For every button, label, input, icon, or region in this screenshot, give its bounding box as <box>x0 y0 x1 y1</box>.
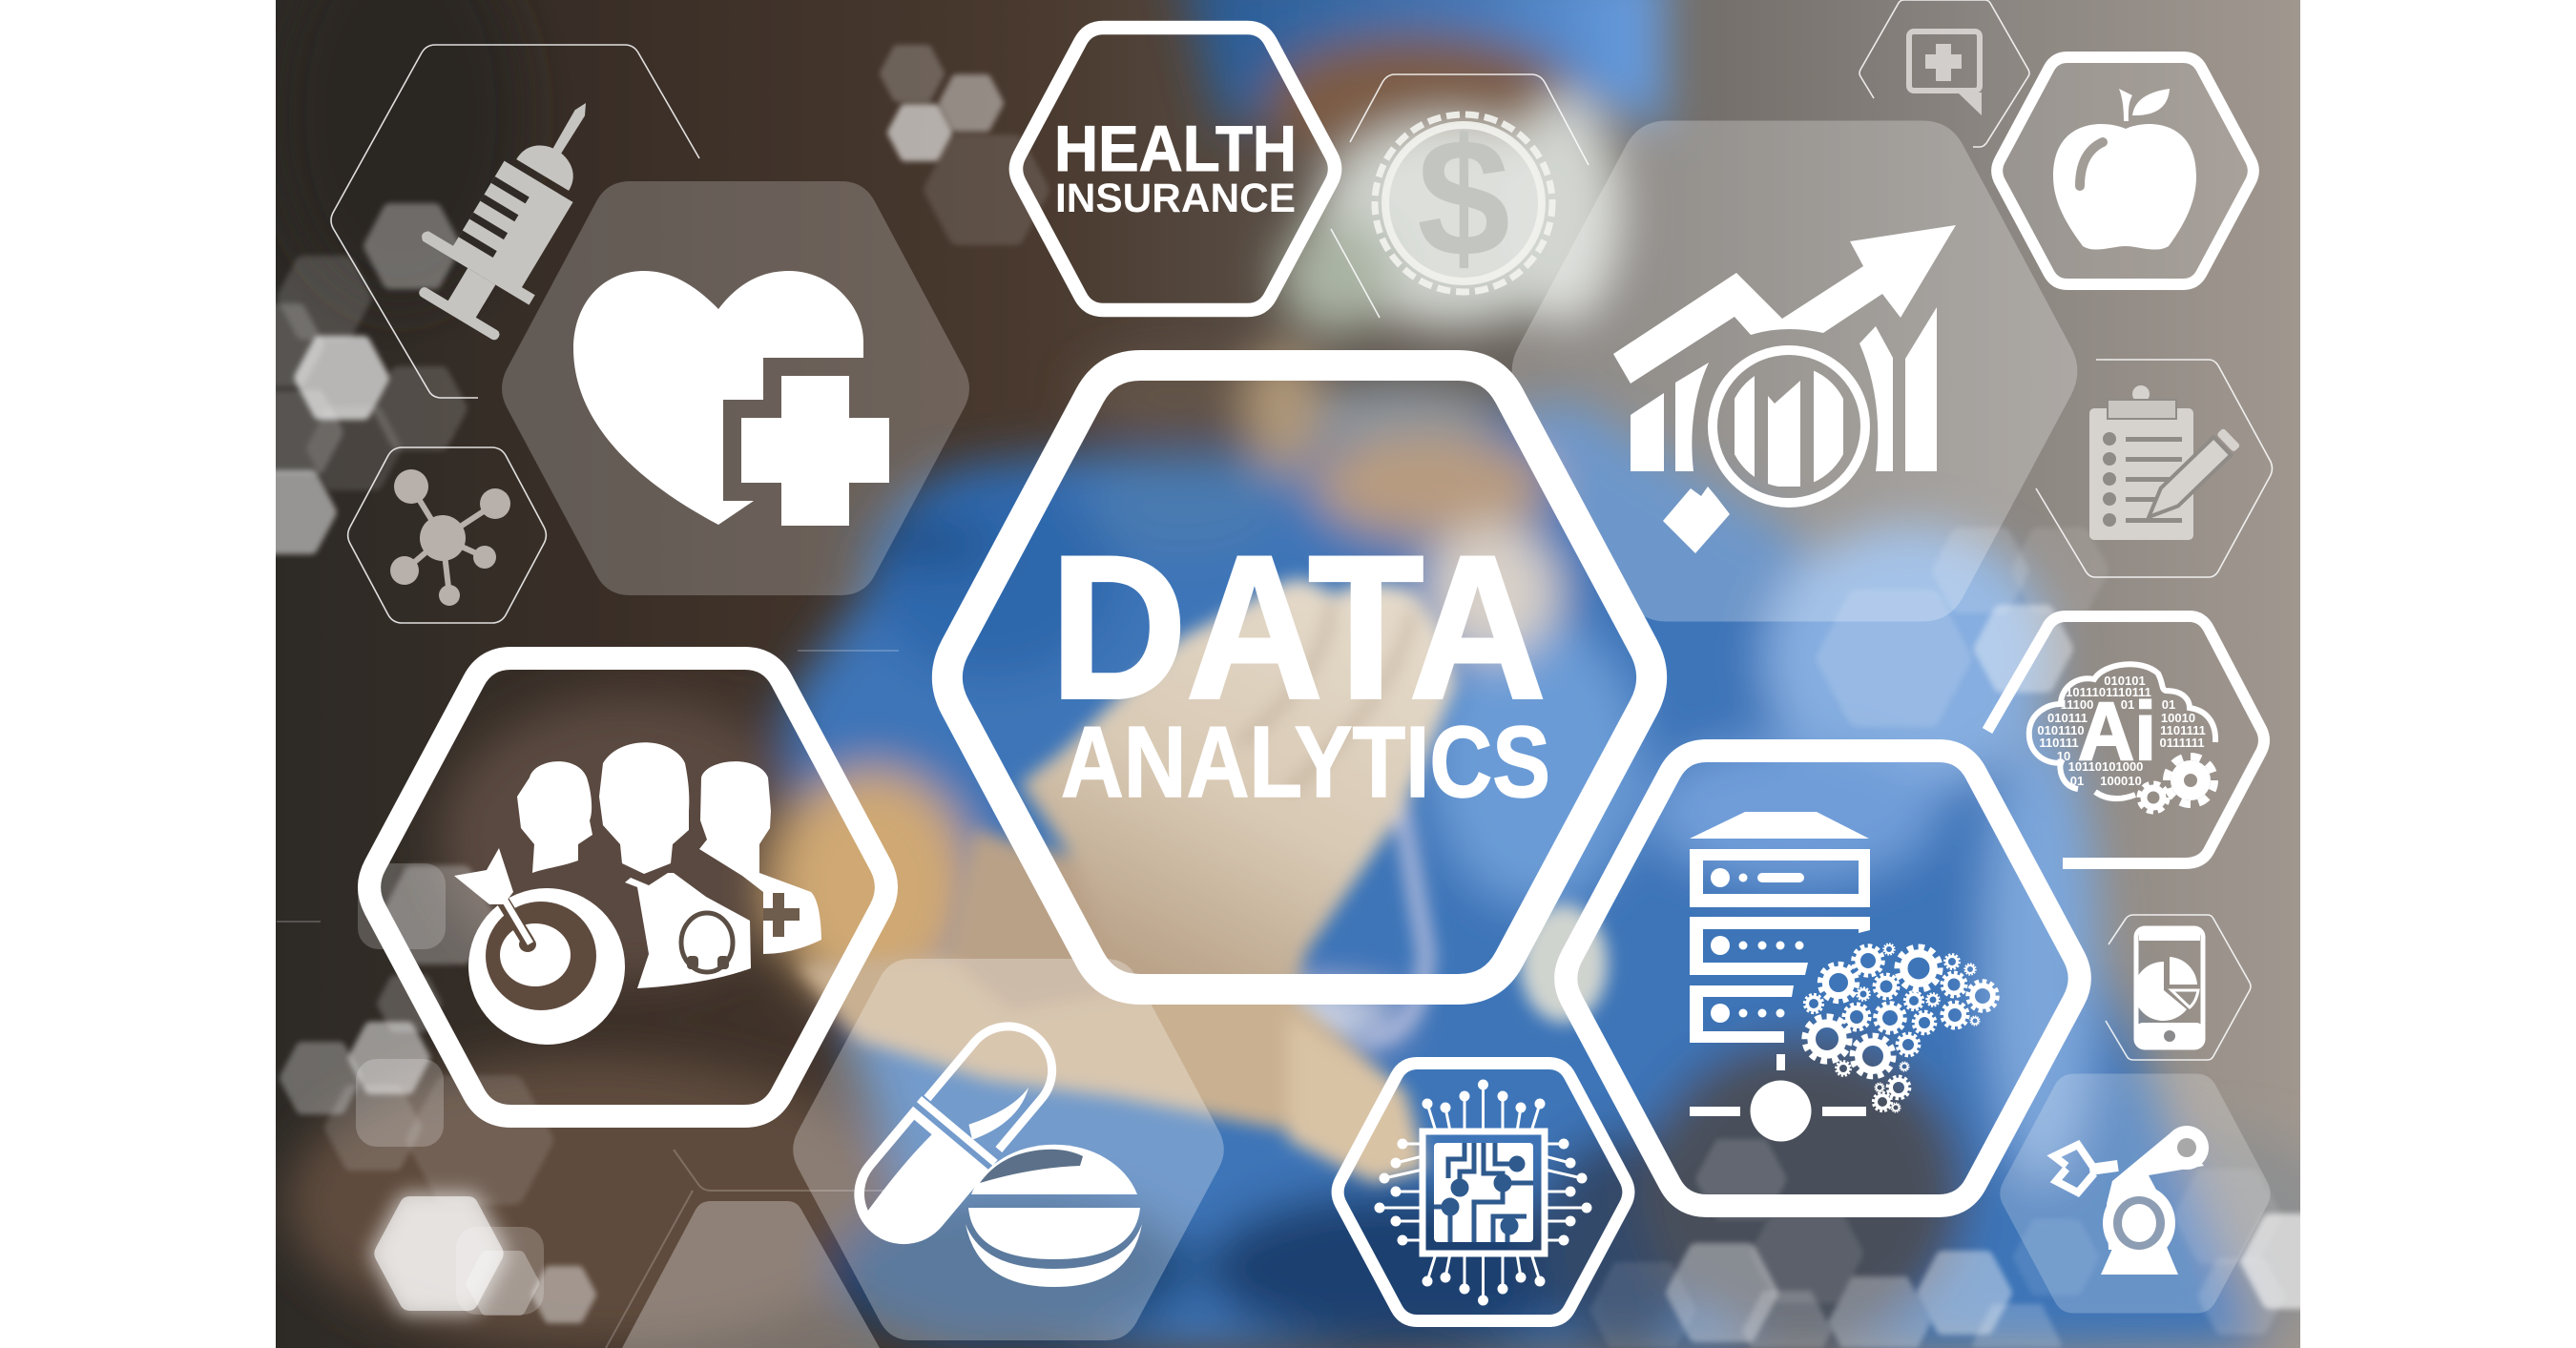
binary digits: 10110101000 <box>2068 759 2143 774</box>
panel: apple hexagon <box>1997 57 2254 284</box>
icon: brain of gears <box>1804 944 1997 1112</box>
binary digits: 10010 <box>2161 711 2195 725</box>
panel: AI cloud hexagon <box>1987 616 2264 863</box>
icon: cloud outline <box>2029 664 2215 798</box>
binary digits: 10 <box>2057 749 2070 763</box>
binary digits: 010101 <box>2104 674 2146 688</box>
panel: health insurance hexagon <box>1016 28 1335 310</box>
icon: medical speech bubble <box>1909 31 1982 115</box>
icon: bars and magnifier <box>1631 307 1937 553</box>
icon: round tablet <box>966 1145 1142 1287</box>
binary digits: 01 <box>2162 697 2175 712</box>
Ai label: Ai <box>2078 686 2156 778</box>
icon: smartphone with pie chart <box>2134 928 2203 1047</box>
icon: capsule <box>854 1022 1057 1244</box>
binary digits: 1011101110111 <box>2066 685 2151 699</box>
panel: translucent hexagon with pills <box>793 959 1224 1340</box>
binary digits: 11100 <box>2061 697 2093 712</box>
heading: INSURANCE: INSURANCE <box>1055 176 1296 221</box>
panel: team and target hexagon <box>369 658 886 1116</box>
panel: partial translucent hexagon at bottom <box>622 1201 880 1348</box>
heading: HEALTH: HEALTH <box>1054 113 1297 185</box>
network lines bottom left <box>277 651 987 1348</box>
icon: doctors team <box>517 742 821 988</box>
panel: central data analytics hexagon <box>947 365 1652 989</box>
icon: heart <box>573 271 863 525</box>
heading: DATA: DATA <box>1050 514 1546 741</box>
icon: dollar coin: $ <box>1417 105 1510 292</box>
icon: clipboard with pencil <box>2089 385 2240 540</box>
binary digits: 01 <box>2070 774 2084 788</box>
panel: translucent hexagon with robot arm <box>2000 1074 2271 1313</box>
icon: target with arrow <box>454 848 625 1045</box>
icon: syringe <box>394 66 634 346</box>
binary digits: 010111 <box>2047 711 2088 725</box>
panel: server and brain hexagon <box>1566 751 2080 1206</box>
panel: translucent hexagon with growth chart <box>1512 120 2077 622</box>
binary digits: 100010 <box>2100 774 2142 788</box>
binary digits: 01 <box>2121 697 2134 712</box>
bokeh hexagons right and bottom <box>1589 528 2348 1348</box>
binary digits <box>2037 674 2206 788</box>
icon: rising arrow <box>1613 225 1956 384</box>
icon: microchip <box>1376 1081 1590 1304</box>
panel: microchip hexagon <box>1338 1063 1629 1320</box>
icon: robot arm <box>2054 1126 2209 1275</box>
thin hexagon outlines <box>331 0 2273 1060</box>
icon: apple <box>2053 89 2196 250</box>
icon: molecule <box>390 469 510 606</box>
bokeh hexagons bottom left <box>280 863 596 1323</box>
bokeh hexagons top left <box>229 45 1049 554</box>
binary digits: 0101110 <box>2037 723 2085 737</box>
icon: medical cross <box>741 376 889 526</box>
binary digits: 0111111 <box>2159 736 2205 750</box>
icon: server stack <box>1690 812 1870 1141</box>
icon: gears <box>2139 757 2214 812</box>
panel: translucent hexagon with heart <box>502 181 969 595</box>
heading: ANALYTICS: ANALYTICS <box>1061 706 1550 819</box>
binary digits: 110111 <box>2039 736 2079 750</box>
binary digits: 1101111 <box>2160 723 2206 737</box>
icon: dollar coin <box>1375 105 1552 292</box>
